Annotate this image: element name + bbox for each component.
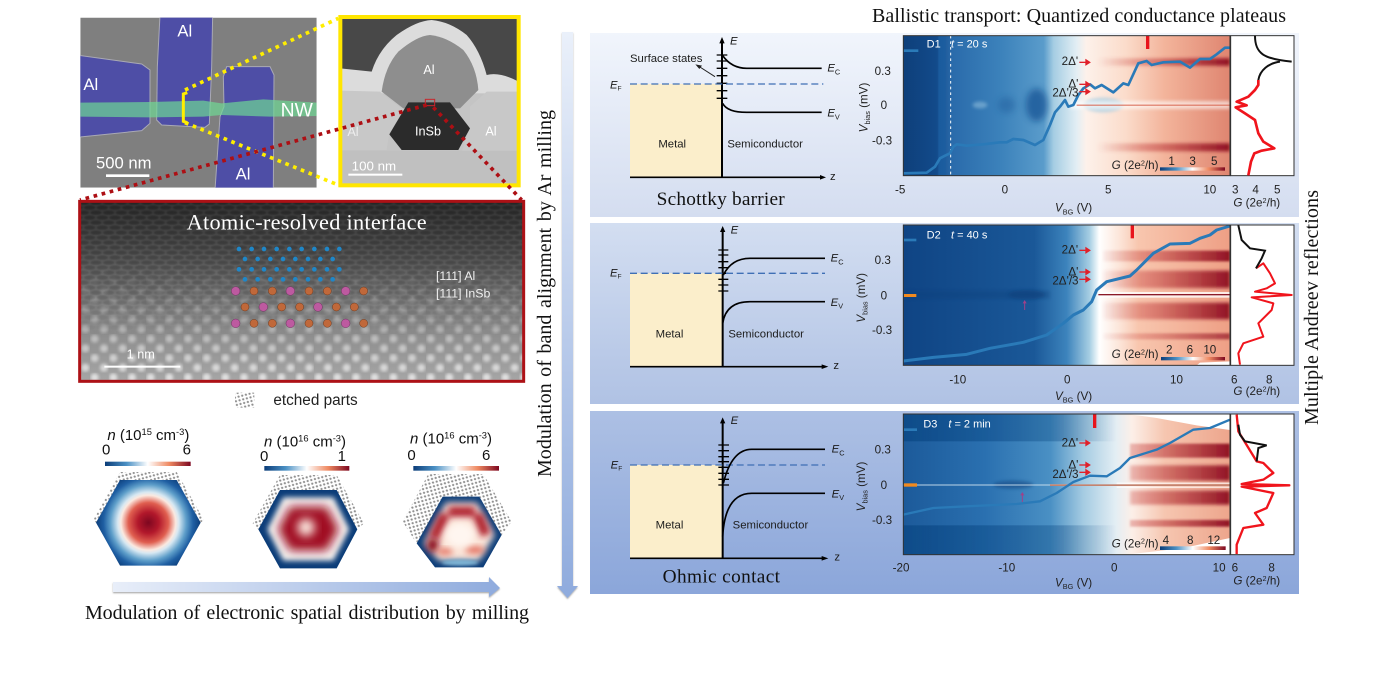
band diagram: Ohmic: V <box>839 493 844 502</box>
map 2: 1 <box>338 448 346 465</box>
axes labels <box>857 65 1217 216</box>
axes labels: -10 <box>998 561 1016 574</box>
map 2: -3 <box>333 434 341 444</box>
cross-section SEM in yellow frame: Al <box>347 125 359 139</box>
yellow marker <box>183 93 187 123</box>
axes labels: -10 <box>949 373 967 386</box>
colour bar: 5 <box>1211 155 1217 168</box>
axes labels: 0 <box>881 289 888 302</box>
axes labels: V <box>855 502 868 511</box>
map 3 <box>403 430 512 567</box>
map 3: n (10 <box>410 430 444 447</box>
labels <box>83 22 314 183</box>
colour bar: /h) <box>1145 537 1159 550</box>
colour bar: G (2e <box>1112 348 1141 361</box>
panel: atomic-resolved interface <box>80 201 524 381</box>
heatmap D1: D1 <box>927 39 941 51</box>
line cut D1 <box>1231 36 1294 210</box>
panel: Schottky barrier row <box>590 33 1299 217</box>
cross-section SEM in yellow frame: 100 nm <box>352 159 396 174</box>
map 3: 16 <box>444 430 455 440</box>
panel: electron density maps <box>93 427 512 568</box>
colour bar: 12 <box>1207 534 1220 547</box>
heatmap D2 <box>855 225 1294 405</box>
map 1: n (10 <box>107 427 142 444</box>
line cut D3: 8 <box>1268 561 1275 574</box>
axes labels: -5 <box>895 183 905 196</box>
map 3: ) <box>487 430 492 447</box>
axes labels: -20 <box>893 561 910 574</box>
axes labels: (V) <box>1073 390 1092 403</box>
panel: Ohmic contact row <box>590 411 1299 594</box>
map 1: cm <box>152 427 176 444</box>
band diagram: Ohmic: E <box>611 459 619 471</box>
map 3: -3 <box>479 430 487 440</box>
arrow: spatial distribution modulation <box>113 577 500 597</box>
axes labels: 10 <box>1213 561 1226 574</box>
line cut D1: 3 <box>1232 183 1238 196</box>
map 1: 15 <box>142 427 152 437</box>
band diagram: Ohmic <box>611 415 845 588</box>
axes labels: 0 <box>881 479 888 492</box>
cross-section SEM in yellow frame <box>340 17 519 185</box>
axes labels: -0.3 <box>872 324 892 337</box>
scale bar <box>104 347 180 368</box>
colour bar: 2 <box>1141 537 1145 546</box>
scale bar: 1 nm <box>127 347 155 361</box>
axes labels: 0.3 <box>875 65 891 78</box>
band diagram: Ohmic: E <box>832 444 840 456</box>
band diagram: intermediate <box>610 224 844 372</box>
axes labels: (mV) <box>855 273 868 301</box>
band diagram: Schottky: Schottky barrier <box>657 189 785 210</box>
line cut D1: /h) <box>1267 197 1280 210</box>
line cut D2: /h) <box>1267 385 1280 398</box>
Al contacts <box>77 15 274 190</box>
crystal direction labels: [111] InSb <box>436 287 491 301</box>
axes labels: V <box>1055 390 1064 403</box>
line cut D2: 2 <box>1263 384 1267 393</box>
axes labels: 0.3 <box>875 254 891 267</box>
heatmap D1: t = 20 s <box>951 39 988 51</box>
heatmap D1: 2Δ'/3 <box>1052 86 1079 99</box>
colour bar: /h) <box>1145 159 1159 172</box>
band diagram: Ohmic: Metal <box>656 520 683 532</box>
axes labels: V <box>1055 202 1064 215</box>
band diagram: intermediate: E <box>610 268 618 280</box>
colour bar: /h) <box>1145 348 1159 361</box>
heatmap D3: D3 <box>923 418 937 430</box>
band diagram: Ohmic: Semiconductor <box>733 520 808 532</box>
map 3: 0 <box>407 447 416 464</box>
crystal direction labels: [111] Al <box>436 269 475 283</box>
band diagram: intermediate: C <box>838 257 844 266</box>
band diagram: intermediate: Semiconductor <box>728 328 804 340</box>
yellow dotted zoom lines <box>185 18 338 185</box>
legend: etched parts <box>235 392 358 409</box>
heatmap D3 <box>855 414 1294 591</box>
axes labels: BG <box>1063 582 1074 591</box>
cross-section SEM in yellow frame: Al <box>423 63 435 77</box>
band diagram: Schottky: E <box>827 108 835 120</box>
axes labels: bias <box>861 490 870 504</box>
heatmap D2: Δ' <box>1068 265 1078 278</box>
line cut D1: 2 <box>1263 196 1267 205</box>
labels: Al <box>177 22 192 41</box>
heatmap D1: Δ' <box>1068 77 1078 90</box>
map 2: n (10 <box>264 434 298 451</box>
colour bar: 2 <box>1166 343 1172 356</box>
red dotted zoom lines <box>80 105 522 200</box>
line cut D3: /h) <box>1267 575 1280 588</box>
arrow: band alignment <box>557 32 578 598</box>
map 2: ) <box>341 434 346 451</box>
line cut D3 <box>1231 414 1294 588</box>
line cut D1: G (2e <box>1233 197 1263 210</box>
colour bar <box>1112 343 1225 361</box>
map 3: 6 <box>482 447 490 464</box>
heatmap D3: Δ' <box>1068 458 1078 471</box>
legend: etched parts: etched parts <box>273 392 358 409</box>
panel: intermediate row <box>590 223 1299 405</box>
axes labels: (mV) <box>857 82 870 111</box>
band diagram: Schottky <box>610 35 841 210</box>
map 2: 0 <box>260 448 268 465</box>
labels: NW <box>281 101 314 122</box>
colour bar <box>1112 534 1226 550</box>
axes labels: (V) <box>1073 202 1092 215</box>
band diagram: intermediate: z <box>833 360 839 372</box>
cross-section SEM in yellow frame: Al <box>485 125 497 139</box>
band diagram: intermediate: Metal <box>656 328 683 340</box>
Sb atoms <box>241 287 368 327</box>
map 1: ) <box>184 427 189 444</box>
scale bar <box>106 174 149 177</box>
line cut D3: 6 <box>1232 561 1238 574</box>
band diagram: Schottky: Metal <box>658 138 686 150</box>
colour bar: 2 <box>1141 347 1145 356</box>
labels: 500 nm <box>96 153 152 172</box>
line cut D2: 6 <box>1231 373 1237 386</box>
axes labels: 5 <box>1105 183 1111 196</box>
axis label: band alignment: Modulation of band alignment by Ar milling <box>534 110 556 477</box>
band diagram: Ohmic: C <box>839 448 845 457</box>
map 1: 0 <box>102 441 110 458</box>
axes labels: 0.3 <box>875 444 891 457</box>
band diagram: Schottky: C <box>835 67 841 76</box>
SEM image of device <box>77 15 317 190</box>
heatmap D3: 2Δ'/3 <box>1052 468 1079 481</box>
heatmap D2: t = 40 s <box>951 229 988 241</box>
band diagram: Schottky: V <box>835 112 840 121</box>
line cut D2: 8 <box>1266 373 1272 386</box>
axes labels: 0 <box>1064 373 1071 386</box>
axes labels: 0 <box>1111 561 1118 574</box>
colour bar: 8 <box>1187 534 1193 547</box>
axes labels: 0 <box>1002 183 1009 196</box>
labels: Al <box>83 75 98 94</box>
axes labels: -0.3 <box>872 514 892 527</box>
colour bar: 1 <box>1168 155 1175 168</box>
axes labels: BG <box>1063 396 1074 405</box>
band diagram: Ohmic: Ohmic contact <box>663 567 781 588</box>
band diagram: Ohmic: z <box>834 552 840 564</box>
axes labels: 0 <box>881 99 888 112</box>
axes labels: V <box>857 123 870 132</box>
heading: Atomic-resolved interface <box>187 209 427 234</box>
map 2 <box>253 434 364 568</box>
band diagram: intermediate: V <box>838 302 843 311</box>
line cut D3: G (2e <box>1233 575 1263 588</box>
band diagram: Schottky: Surface states <box>630 53 703 65</box>
colour bar <box>1112 155 1225 172</box>
colour bar: 2 <box>1141 158 1145 167</box>
heatmap D2: D2 <box>927 229 941 241</box>
axes labels: bias <box>863 111 872 125</box>
colour bar: 6 <box>1187 343 1193 356</box>
map 3: cm <box>455 430 479 447</box>
colour bar: G (2e <box>1112 537 1141 550</box>
map 2: 16 <box>298 434 309 444</box>
nanowire <box>80 99 317 117</box>
axes labels <box>855 254 1183 405</box>
map 1: 6 <box>183 441 191 458</box>
band diagram: intermediate: E <box>731 224 739 236</box>
axis label: Andreev reflections: Multiple Andreev reflections <box>1301 190 1323 425</box>
heatmap D2: 2Δ' <box>1062 243 1078 256</box>
band diagram: Schottky: Semiconductor <box>727 138 803 150</box>
axes labels: (mV) <box>855 461 868 490</box>
heatmap D1: 2Δ' <box>1062 55 1078 68</box>
labels: Al <box>236 164 250 183</box>
heading: ballistic transport: Ballistic transport: Quantized conductance plateaus <box>872 5 1286 27</box>
cross-section SEM in yellow frame: InSb <box>415 125 441 139</box>
Al atoms <box>237 247 342 282</box>
colour bar: G (2e <box>1112 159 1141 172</box>
caption: spatial distribution: Modulation of electronic spatial distribution by milling <box>85 602 529 624</box>
axes labels: 10 <box>1203 183 1217 196</box>
band diagram: Ohmic: F <box>618 465 622 472</box>
heatmap D3: t = 2 min <box>948 418 991 430</box>
band diagram: intermediate: E <box>831 297 839 309</box>
line cut D1: 4 <box>1252 183 1259 196</box>
line cut D2 <box>1231 225 1294 398</box>
axes labels: V <box>1055 576 1064 589</box>
band diagram: intermediate: F <box>618 274 622 281</box>
map 2: cm <box>309 434 333 451</box>
axes labels <box>855 444 1226 591</box>
band diagram: Schottky: E <box>730 35 738 47</box>
In atoms <box>231 287 350 328</box>
axes labels: -0.3 <box>872 134 892 147</box>
axes labels: (V) <box>1073 576 1092 589</box>
band diagram: Ohmic: E <box>731 415 739 427</box>
axes labels: 10 <box>1170 373 1183 386</box>
line cut D3: 2 <box>1263 574 1267 583</box>
crystal direction labels <box>436 269 491 301</box>
colour bar: 10 <box>1203 343 1217 356</box>
band diagram: Ohmic: E <box>832 488 840 500</box>
band diagram: Schottky: E <box>827 63 835 75</box>
map 1: -3 <box>176 427 184 437</box>
heatmap D1 <box>857 36 1294 216</box>
axes labels: BG <box>1063 207 1074 216</box>
band diagram: Schottky: E <box>610 79 618 91</box>
colour bar: 3 <box>1189 155 1196 168</box>
map 1 <box>93 427 204 566</box>
band diagram: Schottky: z <box>830 171 836 183</box>
line cut D2: G (2e <box>1233 385 1263 398</box>
axes labels: V <box>855 314 868 323</box>
band diagram: intermediate: E <box>831 253 839 265</box>
line cut D1: 5 <box>1274 183 1280 196</box>
axes labels: bias <box>861 301 870 315</box>
colour bar: 4 <box>1163 534 1170 547</box>
heatmap D3: 2Δ' <box>1062 437 1078 450</box>
band diagram: Schottky: F <box>618 85 622 92</box>
heatmap D2: 2Δ'/3 <box>1052 275 1079 288</box>
